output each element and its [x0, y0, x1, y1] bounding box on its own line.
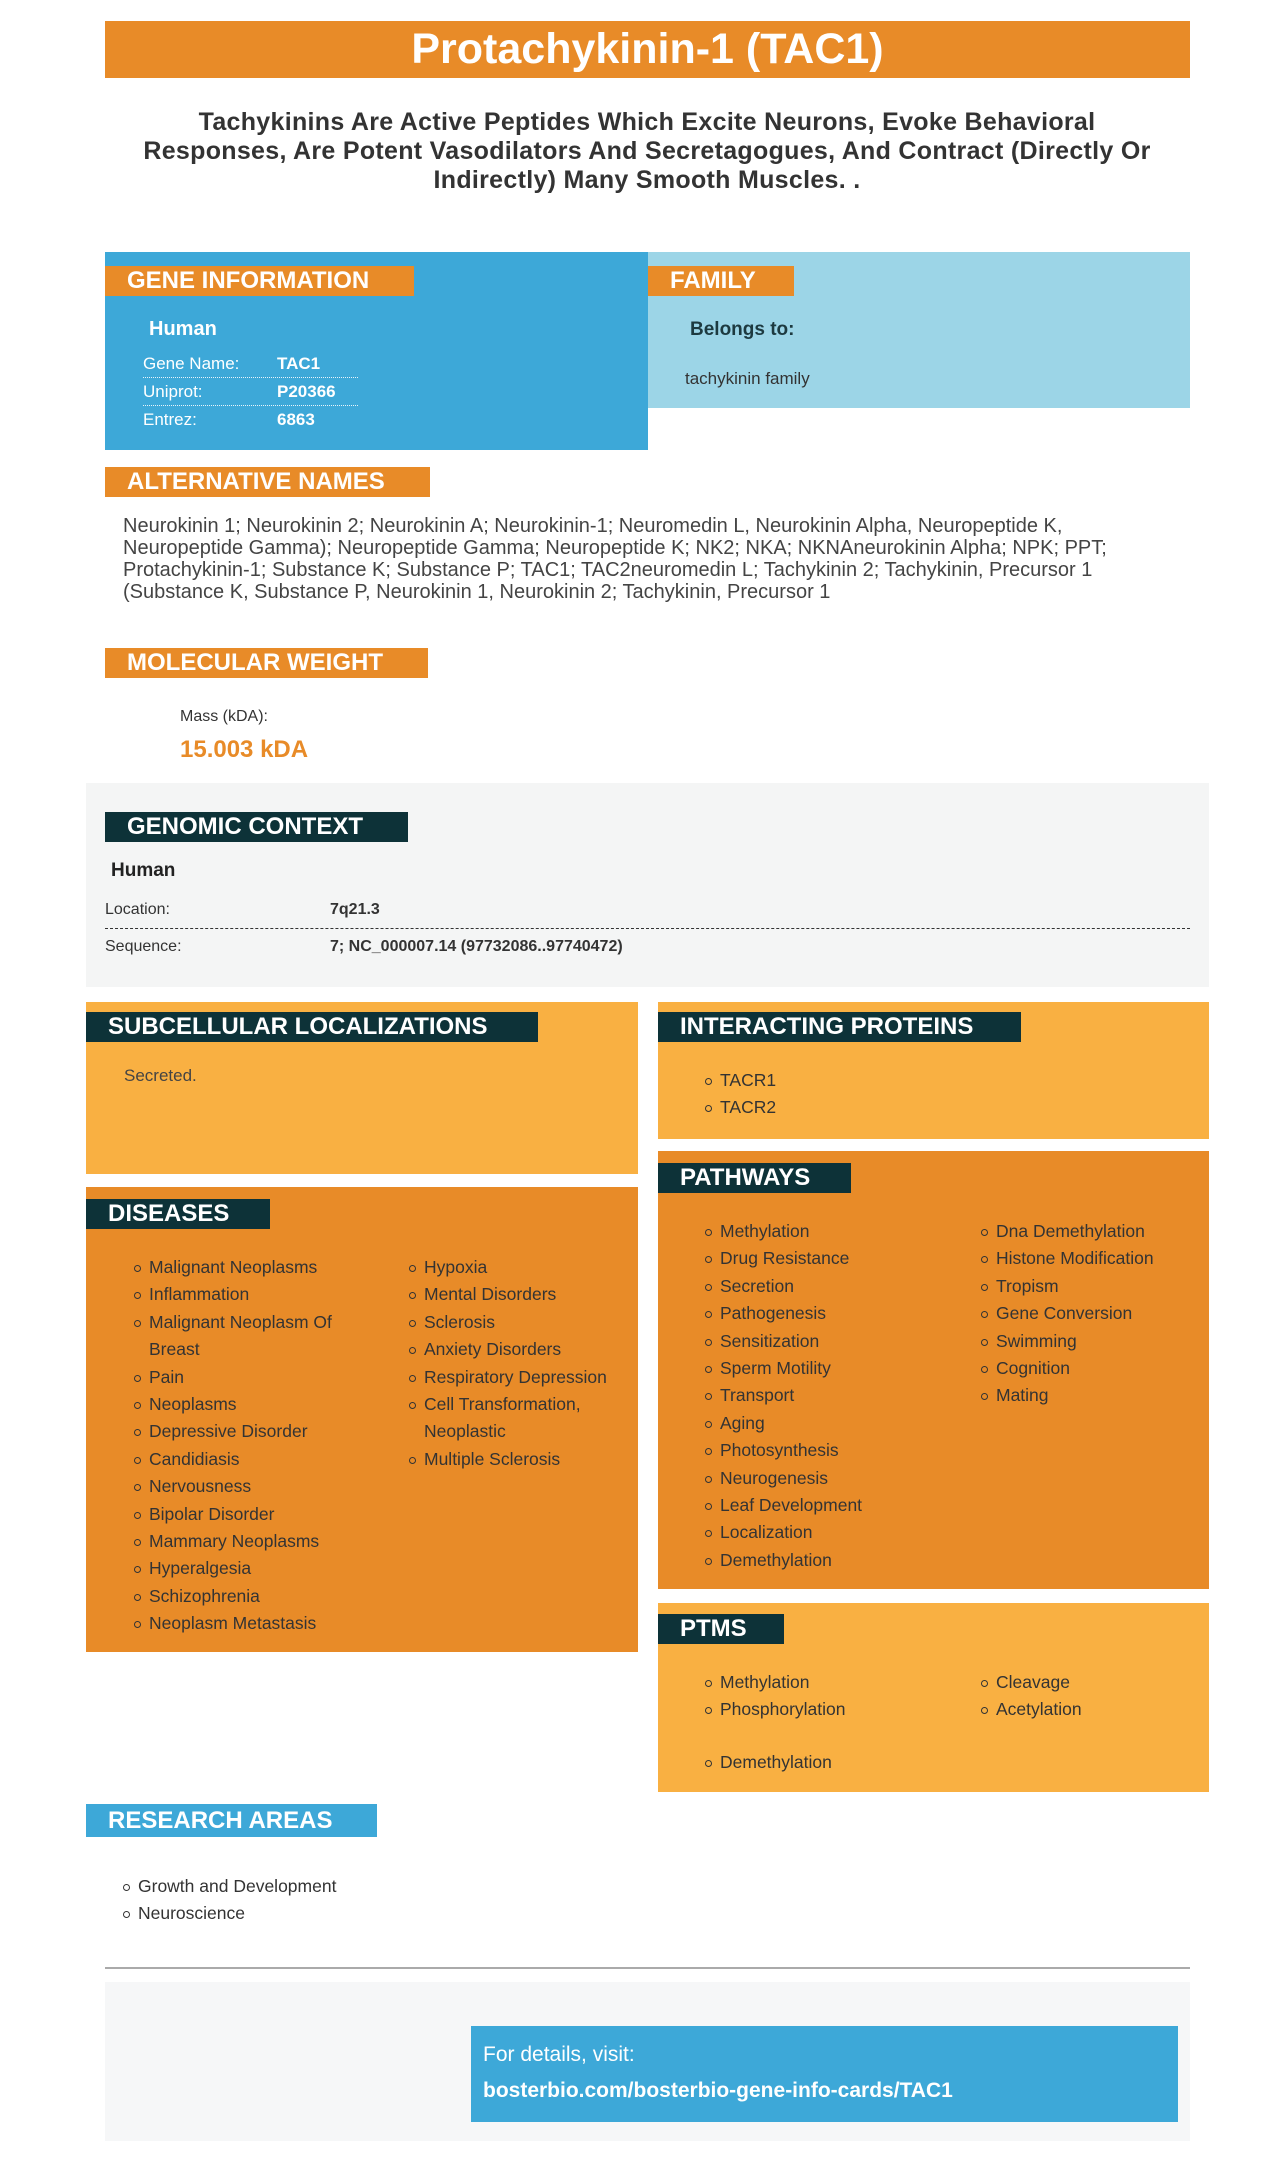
list col 2 [981, 1672, 1082, 1719]
gene info table: Uniprot: [143, 382, 203, 401]
list col 1: Photosynthesis [720, 1440, 839, 1460]
list col 1: Candidiasis [149, 1449, 239, 1469]
list col 2: Acetylation [996, 1699, 1082, 1719]
sequence row: Sequence: [105, 938, 182, 955]
heading: family: FAMILY [670, 267, 756, 294]
panel: diseases [86, 1187, 638, 1652]
list col 1: Malignant Neoplasms [149, 1257, 317, 1277]
list col 1: Methylation [720, 1221, 810, 1241]
list col 1: Secretion [720, 1276, 794, 1296]
list col 2: Tropism [996, 1276, 1059, 1296]
location row: 7q21.3 [330, 901, 380, 918]
heading: alternative names: ALTERNATIVE NAMES [127, 468, 385, 495]
panel: interacting proteins [658, 1002, 1209, 1139]
list col 1: Nervousness [149, 1476, 251, 1496]
list col 2: Dna Demethylation [996, 1221, 1145, 1241]
list col 1: Pain [149, 1367, 184, 1387]
callout: details link [471, 2026, 1178, 2122]
text: secreted: Secreted. [124, 1066, 197, 1085]
text: mass label: Mass (kDA): [180, 708, 268, 725]
location row: Location: [105, 901, 170, 918]
title [105, 21, 1190, 78]
list col 1: Schizophrenia [149, 1586, 260, 1606]
list col 2: Anxiety Disorders [424, 1339, 561, 1359]
heading [86, 1199, 270, 1229]
heading: research areas: RESEARCH AREAS [108, 1807, 332, 1834]
panel: gene information [105, 252, 648, 450]
list col 1: Methylation [720, 1672, 810, 1692]
gene info table [143, 354, 358, 429]
list col 1: Localization [720, 1522, 812, 1542]
list col 2: Respiratory Depression [424, 1367, 607, 1387]
list col 1: Sensitization [720, 1331, 819, 1351]
list col 1: Pathogenesis [720, 1303, 826, 1323]
text: family name: tachykinin family [685, 369, 810, 388]
heading: PTMS [680, 1615, 747, 1642]
list col 1: Demethylation [720, 1752, 832, 1772]
text: alternative names: Neurokinin 1; Neurokinin 2; Neurokinin A; Neurokinin-1; Neuromedin L, Neurokinin Alpha, Neuropeptide K, Neuropeptide Gamma); Neuropeptide Gamma; Neuropeptide K; NK2; NKA; NKNAneurokinin Alpha; NPK; PPT; Protachykinin-1; Substance K; Substance P; TAC1; TAC2neuromedin L; Tachykinin 2; Tachykinin, Precursor 1 (Substance K, Substance P, Neurokinin 1, Neurokinin 2; Tachykinin, Precursor 1 [123, 515, 1107, 603]
panel: ptms [658, 1603, 1209, 1792]
list col 2: Cleavage [996, 1672, 1070, 1692]
list: research areas: Neuroscience [138, 1903, 245, 1923]
list col 1: Mammary Neoplasms [149, 1531, 319, 1551]
subtitle: Tachykinins Are Active Peptides Which Excite Neurons, Evoke Behavioral Responses, Are Potent Vasodilators And Secretagogues, And Contract (Directly Or Indirectly) Many Smooth Muscles. . [143, 108, 1151, 194]
heading [658, 1614, 784, 1644]
list col 2: Mental Disorders [424, 1284, 556, 1304]
divider [105, 1967, 1190, 1969]
panel: genomic context [86, 783, 1209, 987]
location row [105, 899, 1190, 929]
heading: gene information: GENE INFORMATION [127, 267, 369, 294]
list: research areas [123, 1876, 336, 1923]
list col 1: Neurogenesis [720, 1468, 828, 1488]
list col 2: Swimming [996, 1331, 1077, 1351]
panel: family [648, 252, 1190, 408]
title: Protachykinin-1 (TAC1) [411, 25, 884, 73]
list col 1: Breast [149, 1339, 200, 1359]
gene info table: Gene Name: [143, 354, 239, 373]
list col 1: Leaf Development [720, 1495, 862, 1515]
callout: details link: bosterbio.com/bosterbio-gene-info-cards/TAC1 [483, 2079, 953, 2102]
list col 1 [134, 1257, 332, 1633]
heading: SUBCELLULAR LOCALIZATIONS [108, 1013, 488, 1040]
gene info table: 6863 [277, 410, 315, 429]
heading [658, 1163, 851, 1193]
panel: subcellular localizations [86, 1002, 638, 1174]
footer panel [105, 1982, 1190, 2141]
list col 1: Hyperalgesia [149, 1558, 251, 1578]
list col 2: Sclerosis [424, 1312, 495, 1332]
list col 2: Cognition [996, 1358, 1070, 1378]
heading: INTERACTING PROTEINS [680, 1013, 973, 1040]
gene info table: P20366 [277, 382, 336, 401]
panel: pathways [658, 1151, 1209, 1589]
list: research areas: Growth and Development [138, 1876, 336, 1896]
list col 1: Neoplasm Metastasis [149, 1613, 316, 1633]
text: human: Human [111, 860, 175, 881]
text: belongs to: Belongs to: [690, 319, 794, 340]
list col 2: Mating [996, 1385, 1049, 1405]
list col 2: Histone Modification [996, 1248, 1154, 1268]
list: TACR2 [720, 1097, 776, 1117]
text: human: Human [149, 318, 217, 340]
list col 1: Phosphorylation [720, 1699, 846, 1719]
list col 2: Neoplastic [424, 1421, 506, 1441]
text: mass value: 15.003 kDA [180, 736, 308, 763]
heading: research areas [86, 1804, 377, 1837]
list [705, 1070, 776, 1117]
list col 1: Demethylation [720, 1550, 832, 1570]
list col 1: Inflammation [149, 1284, 249, 1304]
list col 1: Malignant Neoplasm Of [149, 1312, 332, 1332]
list col 1: Bipolar Disorder [149, 1504, 274, 1524]
heading: molecular weight: MOLECULAR WEIGHT [127, 649, 383, 676]
list col 2 [981, 1221, 1154, 1405]
list col 2: Cell Transformation, [424, 1394, 581, 1414]
list col 1: Depressive Disorder [149, 1421, 308, 1441]
list: TACR1 [720, 1070, 776, 1090]
sequence row [105, 938, 623, 955]
list col 1: Drug Resistance [720, 1248, 849, 1268]
callout: details link: For details, visit: [483, 2043, 635, 2066]
heading: family [648, 266, 794, 296]
list col 1: Transport [720, 1385, 794, 1405]
gene info table: TAC1 [277, 354, 320, 373]
list col 2: Multiple Sclerosis [424, 1449, 560, 1469]
list col 2: Gene Conversion [996, 1303, 1132, 1323]
list col 1: Aging [720, 1413, 765, 1433]
list col 2 [409, 1257, 607, 1469]
list col 1: Neoplasms [149, 1394, 237, 1414]
list col 1: Sperm Motility [720, 1358, 831, 1378]
list col 2: Hypoxia [424, 1257, 487, 1277]
heading: PATHWAYS [680, 1164, 810, 1191]
heading: genomic context: GENOMIC CONTEXT [127, 813, 363, 840]
list col 1 [705, 1221, 862, 1570]
gene info table: Entrez: [143, 410, 197, 429]
sequence row: 7; NC_000007.14 (97732086..97740472) [330, 938, 623, 955]
heading: DISEASES [108, 1200, 229, 1227]
list col 1 [705, 1672, 846, 1772]
